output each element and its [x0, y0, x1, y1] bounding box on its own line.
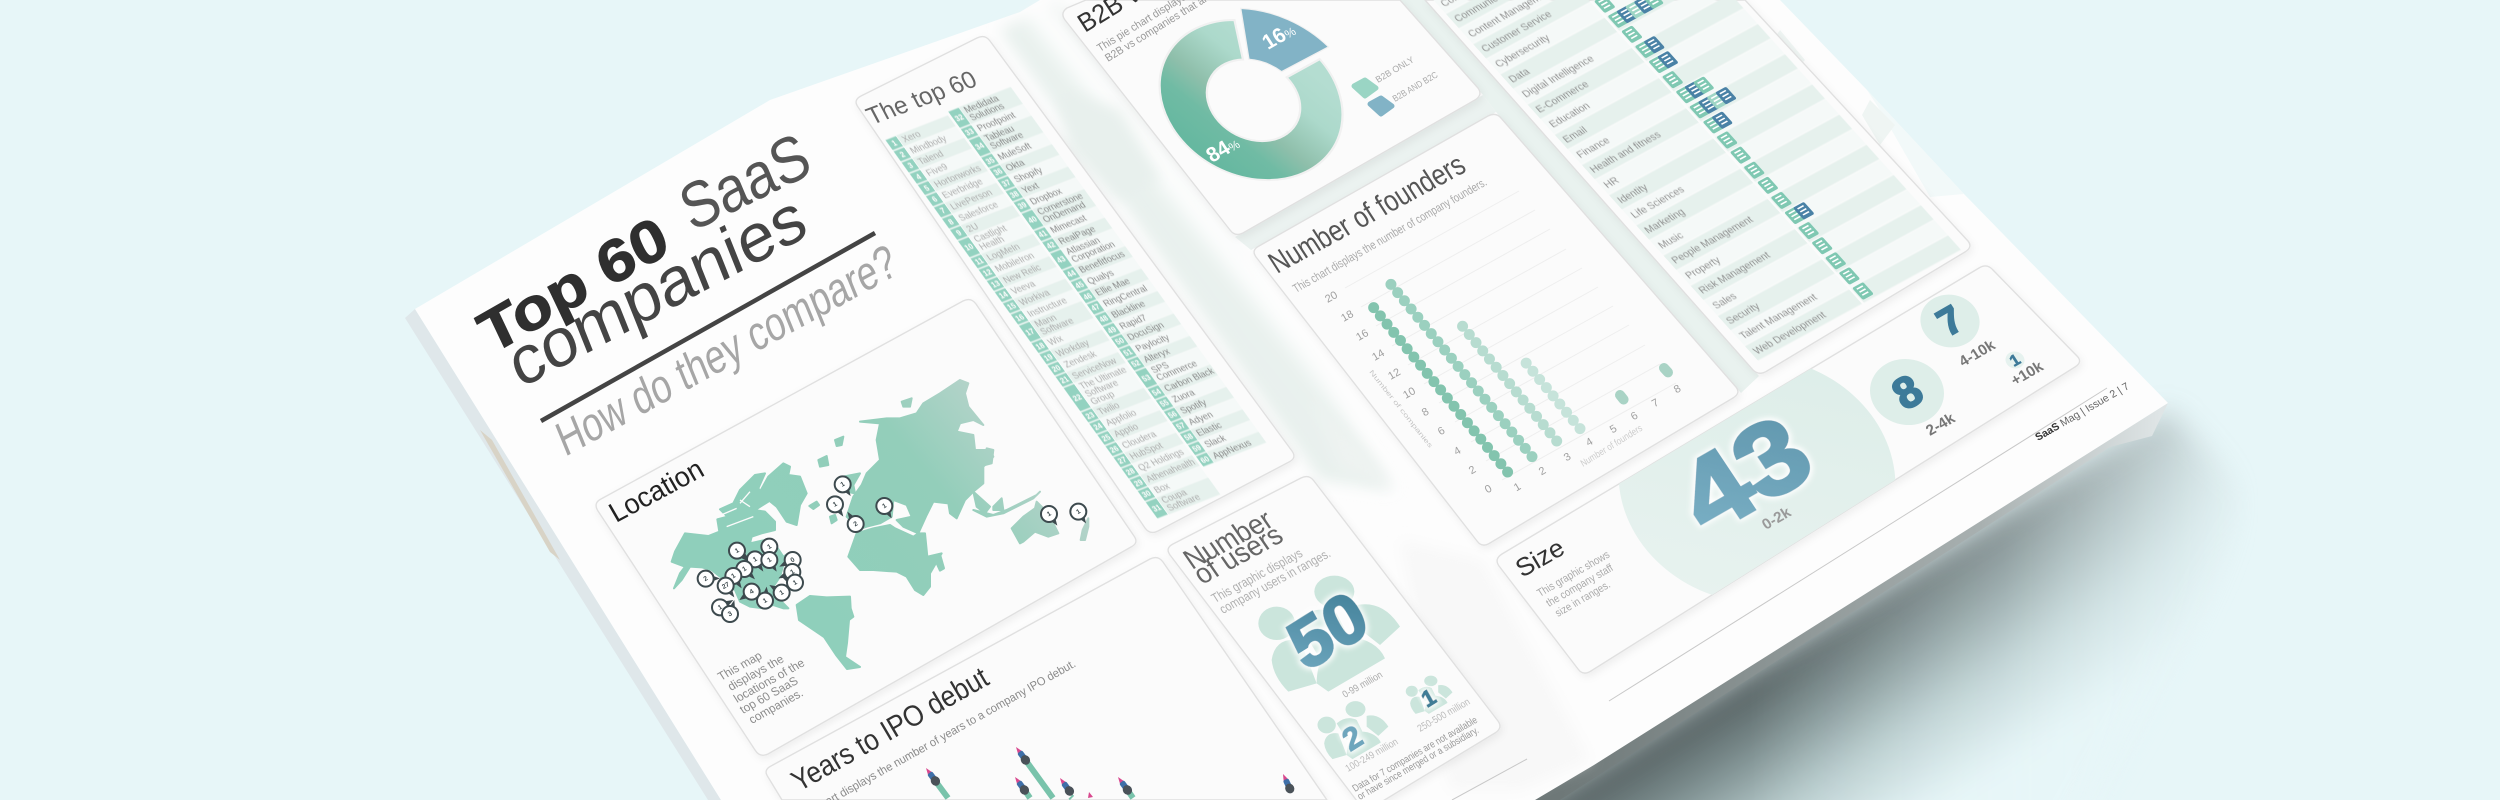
- ranked list, ranks 1 to 31: LogMeIn: [985, 242, 1022, 263]
- location pins: 2: [703, 575, 710, 583]
- category rows: Data: [1506, 66, 1533, 85]
- ranked list, ranks 1 to 31: 1: [890, 139, 899, 148]
- founders y axis labels: 16: [1354, 327, 1371, 344]
- ranked list, ranks 32 to 60: 46: [1081, 291, 1094, 302]
- ranked list, ranks 1 to 31: Xero: [900, 129, 923, 144]
- ranked list, ranks 32 to 60: 51: [1122, 347, 1134, 358]
- ranked list, ranks 1 to 31: Cloudera: [1120, 429, 1159, 450]
- founders chart grid: [1345, 191, 1676, 480]
- founders y axis labels: 8: [1420, 406, 1431, 419]
- footer rule: [1452, 388, 2107, 800]
- location description: This map: [715, 648, 765, 684]
- location pins: 1: [881, 502, 888, 510]
- axis title: number of founders: Number of founders: [1579, 422, 1645, 469]
- world map: [672, 380, 1088, 669]
- ranked list, ranks 1 to 31: Coupa: [1159, 487, 1190, 505]
- ranked list, ranks 32 to 60: Dropbox: [1028, 186, 1065, 207]
- ranked list, ranks 32 to 60: Slack: [1202, 433, 1228, 449]
- ranked list, ranks 32 to 60: Blackline: [1109, 299, 1147, 320]
- ranked list, ranks 32 to 60: RealPage: [1056, 224, 1098, 246]
- users footnote: or have since merged or a subsidiary.: [1355, 725, 1481, 800]
- founders x axis labels: 6: [1629, 410, 1640, 423]
- value 16%: 16%: [1258, 18, 1300, 54]
- panel: number of users: [1168, 477, 1500, 800]
- ranked list, ranks 32 to 60: Spotify: [1178, 397, 1209, 416]
- category rows: Marketing: [1642, 206, 1688, 236]
- location pins: 3: [727, 610, 734, 618]
- building icons per category: [1580, 0, 1909, 300]
- location pins: 27: [721, 581, 731, 591]
- legend: B2B ONLY: [1374, 55, 1416, 85]
- ranked list, ranks 1 to 31: 31: [1150, 503, 1163, 514]
- ranked list, ranks 1 to 31: Twilio: [1095, 400, 1122, 417]
- ranked list, ranks 32 to 60: 41: [1037, 229, 1049, 240]
- ranked list, ranks 32 to 60: 48: [1097, 314, 1110, 324]
- location description: displays the: [725, 652, 787, 694]
- ranked list, ranks 32 to 60: Rapid7: [1117, 313, 1149, 331]
- ranked list, ranks 1 to 31: Veeva: [1009, 279, 1038, 296]
- ranked list, ranks 1 to 31: 4: [914, 172, 924, 182]
- ranked list, ranks 32 to 60: RingCentral: [1101, 284, 1150, 309]
- label 4-10k: 4-10k: [1956, 337, 1999, 370]
- ranked list, ranks 1 to 31: 18: [1034, 341, 1047, 352]
- ranked list, ranks 1 to 31: 30: [1140, 489, 1153, 500]
- founders x axis labels: 3: [1562, 451, 1573, 464]
- ranked list, ranks 1 to 31: 16: [1013, 312, 1026, 323]
- location pins: [698, 476, 1086, 622]
- location pins: 1: [741, 565, 748, 573]
- ranked list, ranks 32 to 60: Alteryx: [1141, 346, 1172, 365]
- circle: 2-4k: [1856, 346, 1958, 438]
- ranked list, ranks 32 to 60: 35: [984, 155, 997, 166]
- users description: This graphic displays: [1208, 546, 1305, 606]
- drop shadow under magazine: [1535, 406, 2224, 800]
- panel: size: [1497, 266, 2080, 673]
- panel: location: [596, 300, 1136, 755]
- ranked list, ranks 1 to 31: 9: [954, 228, 964, 238]
- ranked list, ranks 32 to 60: Zuora: [1170, 387, 1198, 405]
- spine and faint map watermark: [1000, 0, 1964, 790]
- ranked list, ranks 1 to 31: 28: [1124, 466, 1137, 477]
- category rows: Risk Management: [1696, 250, 1773, 297]
- label 100-249 million: 100-249 million: [1343, 735, 1400, 774]
- size description: size in ranges.: [1553, 579, 1613, 620]
- ranked list, ranks 1 to 31: 15: [1005, 301, 1018, 312]
- category rows: Customer Service: [1479, 8, 1555, 55]
- ranked list, ranks 1 to 31: 24: [1092, 421, 1105, 432]
- ranked list, ranks 1 to 31: 13: [989, 279, 1002, 289]
- ranked list, ranks 32 to 60: 43: [1055, 254, 1068, 265]
- ranked list, ranks 1 to 31: 26: [1108, 444, 1121, 455]
- value 7: 7: [1929, 298, 1971, 345]
- top 60 heading: The top 60: [862, 66, 982, 130]
- ranked list, ranks 32 to 60: 57: [1174, 421, 1187, 431]
- ranked list, ranks 32 to 60: 47: [1089, 302, 1102, 313]
- ranked list, ranks 32 to 60: Software: [988, 130, 1026, 151]
- heading line two: companies: [498, 179, 816, 403]
- axis title: number of companies: Number of companies: [1368, 368, 1434, 449]
- ranked list, ranks 1 to 31: The Ultimate: [1077, 365, 1129, 391]
- label 2-4k: 2-4k: [1923, 410, 1959, 439]
- users description: company users in ranges.: [1216, 546, 1333, 617]
- size description: the company staff: [1544, 563, 1616, 610]
- ranked list, ranks 32 to 60: DocuSign: [1125, 320, 1166, 342]
- ranked list, ranks 1 to 31: 20: [1050, 363, 1063, 374]
- ranked list, ranks 1 to 31: Mindbody: [908, 133, 949, 156]
- ranked list, ranks 32 to 60: 40: [1026, 215, 1039, 225]
- founders y axis labels: 10: [1401, 385, 1418, 402]
- category rows: [1432, 0, 1961, 361]
- ranked list, ranks 1 to 31: 25: [1100, 433, 1113, 443]
- ranked list, ranks 32 to 60: Qualys: [1085, 268, 1116, 286]
- location pins: 4: [749, 588, 756, 596]
- location pins: 1: [792, 579, 799, 587]
- label 0-2k: 0-2k: [1759, 504, 1795, 533]
- person dot columns: [1372, 282, 1668, 472]
- ranked list, ranks 1 to 31: 21: [1058, 375, 1071, 385]
- magazine spread scene: [405, 0, 2224, 800]
- ranked list, ranks 32 to 60: 59: [1190, 443, 1203, 454]
- ranked list, ranks 32 to 60: Paylocity: [1133, 332, 1172, 354]
- location pins: 1: [717, 604, 724, 612]
- ranked list, ranks 32 to 60: 39: [1016, 200, 1029, 211]
- location pins: 0: [790, 556, 797, 564]
- ranked list, ranks 32 to 60: 37: [1000, 178, 1013, 189]
- size heading: Size: [1510, 532, 1570, 583]
- ranked list, ranks 1 to 31: Everbridge: [940, 177, 985, 200]
- ranked list, ranks 1 to 31: Talend: [916, 149, 946, 167]
- ranked list, ranks 32 to 60: Tableau: [982, 124, 1017, 143]
- location pins: 2: [853, 520, 860, 528]
- ranked list, ranks 1 to 31: Instructure: [1025, 295, 1069, 319]
- ranked list, ranks 1 to 31: MobileIron: [993, 251, 1036, 274]
- founders y axis labels: 14: [1370, 347, 1387, 364]
- founders x axis labels: 4: [1584, 436, 1595, 449]
- founders y axis labels: 4: [1452, 445, 1463, 458]
- value 50: 50: [1276, 576, 1380, 685]
- magazine pages: [415, 0, 2168, 800]
- ranked list, ranks 32 to 60: 44: [1065, 268, 1079, 279]
- ranked list, ranks 32 to 60: 56: [1166, 409, 1179, 420]
- category rows: Talent Management: [1737, 292, 1820, 342]
- ranked list, ranks 1 to 31: HubSpot: [1128, 441, 1165, 462]
- ranked list, ranks 1 to 31: Group: [1088, 389, 1117, 406]
- founders description: This chart displays the number of company founders.: [1291, 176, 1490, 296]
- location description: [715, 648, 808, 727]
- circle: 4-10k: [1909, 285, 1991, 357]
- location description: companies.: [746, 686, 806, 727]
- ranked list, ranks 32 to 60: 50: [1113, 336, 1126, 347]
- value 1: 1: [1417, 684, 1440, 712]
- ranked list, ranks 1 to 31: 6: [930, 195, 939, 204]
- ranked list, ranks 32 to 60: Adyen: [1186, 409, 1215, 427]
- ranked list, ranks 1 to 31: 3: [906, 161, 915, 170]
- category rows: Property: [1683, 254, 1724, 281]
- donut segment: B2B and B2C 16%: [1217, 0, 1329, 81]
- size description: This graphic shows: [1535, 549, 1612, 600]
- ranked list, ranks 1 to 31: 2: [898, 150, 907, 159]
- founders x axis labels: 7: [1650, 397, 1661, 410]
- ranked list, ranks 32 to 60: Benefitfocus: [1077, 249, 1127, 275]
- donut segment: B2B only 84%: [1122, 0, 1380, 209]
- icon: people cluster, 2: [1317, 701, 1388, 759]
- ranked list, ranks 32 to 60: Shopify: [1012, 165, 1045, 184]
- ranked list, ranks 1 to 31: 14: [997, 290, 1011, 301]
- location pins: 1: [752, 556, 759, 564]
- founders y axis labels: 20: [1323, 289, 1340, 306]
- large circle 0-2k: [1619, 369, 1896, 595]
- ranked list, ranks 1 to 31: 23: [1084, 410, 1097, 421]
- circle: +10k: [2002, 348, 2028, 372]
- location pins: 1: [789, 568, 796, 576]
- category rows: HR: [1601, 174, 1622, 191]
- ranked list, ranks 32 to 60: Solutions: [967, 101, 1007, 123]
- ranked list, ranks 32 to 60: 36: [992, 167, 1005, 177]
- founders x axis labels: 1: [1512, 481, 1523, 494]
- founders y axis labels: 18: [1339, 308, 1356, 325]
- ranked list, ranks 1 to 31: Athenahealth: [1144, 457, 1197, 484]
- users heading: of users: [1187, 519, 1289, 590]
- ranked list, ranks 1 to 31: Mann: [1032, 312, 1059, 329]
- ranked list, ranks 1 to 31: 19: [1042, 352, 1055, 363]
- location pins: 1: [766, 556, 773, 564]
- ranked list, ranks 1 to 31: 2U: [964, 221, 981, 234]
- founders x axis labels: 8: [1672, 383, 1683, 396]
- rocket chart: [922, 744, 1296, 798]
- founders y axis labels: 2: [1467, 464, 1478, 477]
- icon: people cluster, 1: [1406, 676, 1452, 714]
- category rows: Email: [1560, 124, 1590, 146]
- ranked list, ranks 32 to 60: Elastic: [1194, 420, 1224, 438]
- category rows: Sales: [1710, 290, 1740, 312]
- value 84%: 84%: [1202, 131, 1244, 167]
- ranked list, ranks 32 to 60: 38: [1008, 189, 1021, 200]
- title rule: [541, 233, 875, 421]
- icon: people cluster, 50: [1258, 576, 1400, 692]
- ranked list, ranks 1 to 31: Hortonworks: [932, 163, 983, 189]
- founders heading: Number of founders: [1262, 148, 1471, 280]
- ranked list, ranks 32 to 60: 52: [1130, 358, 1142, 369]
- ranked list, ranks 1 to 31: 29: [1132, 478, 1145, 488]
- page stack edge: [405, 309, 2168, 800]
- ranked list, ranks 32 to 60: MuleSoft: [996, 141, 1034, 162]
- ranked list, ranks 32 to 60: 42: [1045, 240, 1057, 251]
- ranked list, ranks 1 to 31: Apptio: [1112, 422, 1140, 439]
- ranked list, ranks 32 to 60: 53: [1140, 373, 1153, 383]
- category rows: Life Sciences: [1628, 184, 1687, 221]
- location description: locations of the: [731, 655, 808, 706]
- location pins: 1: [762, 597, 769, 605]
- founders y axis labels: 0: [1483, 483, 1494, 496]
- label +10k: +10k: [2008, 358, 2047, 389]
- ranked list, ranks 1 to 31: ServiceNow: [1070, 356, 1119, 381]
- ranked list, ranks 1 to 31: Health: [977, 234, 1006, 252]
- ranked list, ranks 1 to 31: Software: [1165, 492, 1203, 513]
- ranked list, ranks 32 to 60: 32: [953, 113, 966, 123]
- ranked list, ranks 1 to 31: Zendesk: [1062, 349, 1099, 370]
- ranked list, ranks 1 to 31: Appfolio: [1104, 408, 1139, 428]
- ranked list, ranks 1 to 31: LivePerson: [948, 187, 994, 212]
- subtitle: How do they compare?: [549, 234, 904, 467]
- legend: B2B AND B2C: [1390, 69, 1440, 104]
- value 1: 1: [2006, 351, 2024, 370]
- panel: number of founders: [1254, 114, 1738, 545]
- ranked list, ranks 32 to 60: 45: [1073, 280, 1086, 291]
- label 0-99 million: 0-99 million: [1340, 668, 1384, 700]
- ranked list, ranks 1 to 31: 8: [946, 217, 955, 226]
- ranked list, ranks 32 to 60: Commerce: [1154, 359, 1200, 383]
- value 43: 43: [1657, 395, 1832, 555]
- ranked list, ranks 1 to 31: 7: [938, 206, 947, 215]
- ranked list, ranks 32 to 60: Yext: [1020, 181, 1042, 195]
- location pins: 1: [840, 481, 847, 489]
- location pins: 1: [1075, 508, 1082, 516]
- ranked list, ranks 32 to 60: Carbon Black: [1162, 366, 1216, 393]
- category rows: Music: [1655, 229, 1687, 251]
- location pins: 1: [832, 501, 839, 509]
- ranked list, ranks 1 to 31: Salesforce: [956, 199, 1000, 223]
- ranked list, ranks 1 to 31: 5: [922, 184, 931, 193]
- founders y axis labels: [1323, 289, 1494, 496]
- heading line one: Top 60: [469, 204, 678, 367]
- ranked list, ranks 1 to 31: 11: [973, 256, 986, 267]
- ranked list, ranks 1 to 31: Q2 Holdings: [1136, 447, 1186, 473]
- category rows: Finance: [1574, 135, 1613, 161]
- ranked list, ranks 32 to 60: SPS: [1149, 360, 1171, 375]
- size description: [1535, 549, 1616, 620]
- ranked list, ranks 32 to 60: 55: [1158, 398, 1171, 409]
- category rows: Cybersecurity: [1492, 32, 1553, 70]
- location description: top 60 SaaS: [737, 674, 801, 717]
- panel: B2B vs B2C: [1063, 0, 1480, 234]
- ranked list, ranks 1 to 31: 12: [981, 268, 994, 278]
- location pins: 1: [779, 589, 786, 597]
- users heading: Number: [1177, 504, 1279, 575]
- ranked list, ranks 1 to 31: 22: [1071, 392, 1084, 403]
- category rows: People Management: [1669, 214, 1756, 266]
- ranked list, ranks 32 to 60: Okta: [1004, 157, 1027, 173]
- ranked list, ranks 1 to 31: 10: [963, 242, 976, 253]
- ranked list, ranks 1 to 31: 17: [1024, 327, 1036, 337]
- IPO heading: Years to IPO debut: [786, 661, 994, 797]
- ranked list, ranks 1 to 31: Wix: [1046, 333, 1065, 347]
- location heading: Location: [603, 453, 709, 528]
- ranked list, ranks 32 to 60: Cornerstone: [1035, 191, 1085, 217]
- heading SaaS: SaaS: [669, 118, 820, 245]
- ranked list, ranks 1 to 31: Workiva: [1017, 287, 1053, 308]
- founders x axis labels: 2: [1537, 465, 1548, 478]
- ranked list, ranks 32 to 60: AppNexus: [1210, 437, 1254, 461]
- ranked list, ranks 32 to 60: 34: [973, 141, 987, 152]
- category rows: Identity: [1615, 181, 1651, 206]
- location pins: 1: [730, 572, 737, 580]
- value 8: 8: [1884, 366, 1932, 419]
- ranked list, ranks 1 to 31: 27: [1116, 455, 1129, 466]
- ranked list, ranks 32 to 60: 54: [1150, 387, 1164, 398]
- ranked list, ranks 1 to 31: Five9: [924, 162, 950, 178]
- ranked list, ranks 1 to 31: Castlight: [972, 223, 1009, 244]
- ranked list, ranks 1 to 31: Box: [1152, 481, 1172, 495]
- founders y axis labels: 12: [1386, 366, 1403, 383]
- founders x axis labels: [1512, 383, 1683, 494]
- ranked list, ranks 1 to 31: [885, 115, 1220, 519]
- ranked list, ranks 32 to 60: 49: [1105, 325, 1118, 335]
- location pins: 1: [734, 547, 741, 555]
- footer text: SaaS Mag | Issue 2 | 7: [2033, 380, 2132, 444]
- founders x axis labels: 5: [1608, 423, 1619, 436]
- ranked list, ranks 32 to 60: Ellie Mae: [1093, 276, 1132, 297]
- title: [469, 118, 904, 467]
- location pins: 1: [766, 543, 773, 551]
- label 250-500 million: 250-500 million: [1415, 695, 1472, 734]
- founders y axis labels: 6: [1436, 425, 1447, 438]
- location pins: 1: [1046, 510, 1053, 518]
- panel: years to IPO debut: [766, 558, 1327, 800]
- ranked list, ranks 32 to 60: 33: [963, 127, 976, 138]
- ranked list, ranks 1 to 31: Software: [1038, 316, 1076, 337]
- panel: category list: [1425, 0, 1970, 373]
- category rows: Digital Intelligence: [1519, 53, 1597, 100]
- ranked list, ranks 32 to 60: Atlassian: [1064, 235, 1102, 257]
- ranked list, ranks 32 to 60: 60: [1199, 454, 1211, 465]
- panel: the top 60: [856, 37, 1294, 532]
- ranked list, ranks 32 to 60: Corporation: [1069, 239, 1117, 264]
- category rows: Education: [1547, 100, 1593, 130]
- ranked list, ranks 32 to 60: Proofpoint: [975, 110, 1018, 133]
- ranked list, ranks 32 to 60: Medidata: [962, 93, 1002, 115]
- category rows: E-Commerce: [1533, 78, 1592, 115]
- ranked list, ranks 32 to 60: [948, 87, 1266, 467]
- category rows: Web Development: [1751, 309, 1829, 357]
- ranked list, ranks 32 to 60: 58: [1182, 432, 1195, 443]
- ranked list, ranks 1 to 31: Software: [1083, 378, 1120, 399]
- ranked list, ranks 1 to 31: Workday: [1054, 337, 1092, 359]
- ranked list, ranks 32 to 60: Mimecast: [1048, 213, 1089, 235]
- category rows: Security: [1723, 300, 1763, 327]
- value 2: 2: [1336, 718, 1369, 758]
- legend: [1354, 55, 1440, 114]
- users footnote: Data for 7 companies are not available: [1350, 714, 1479, 794]
- category rows: Health and fitness: [1587, 129, 1664, 176]
- ranked list, ranks 32 to 60: OnDemand: [1041, 200, 1088, 225]
- ranked list, ranks 1 to 31: New Relic: [1001, 262, 1043, 285]
- donut chart: [1122, 0, 1393, 209]
